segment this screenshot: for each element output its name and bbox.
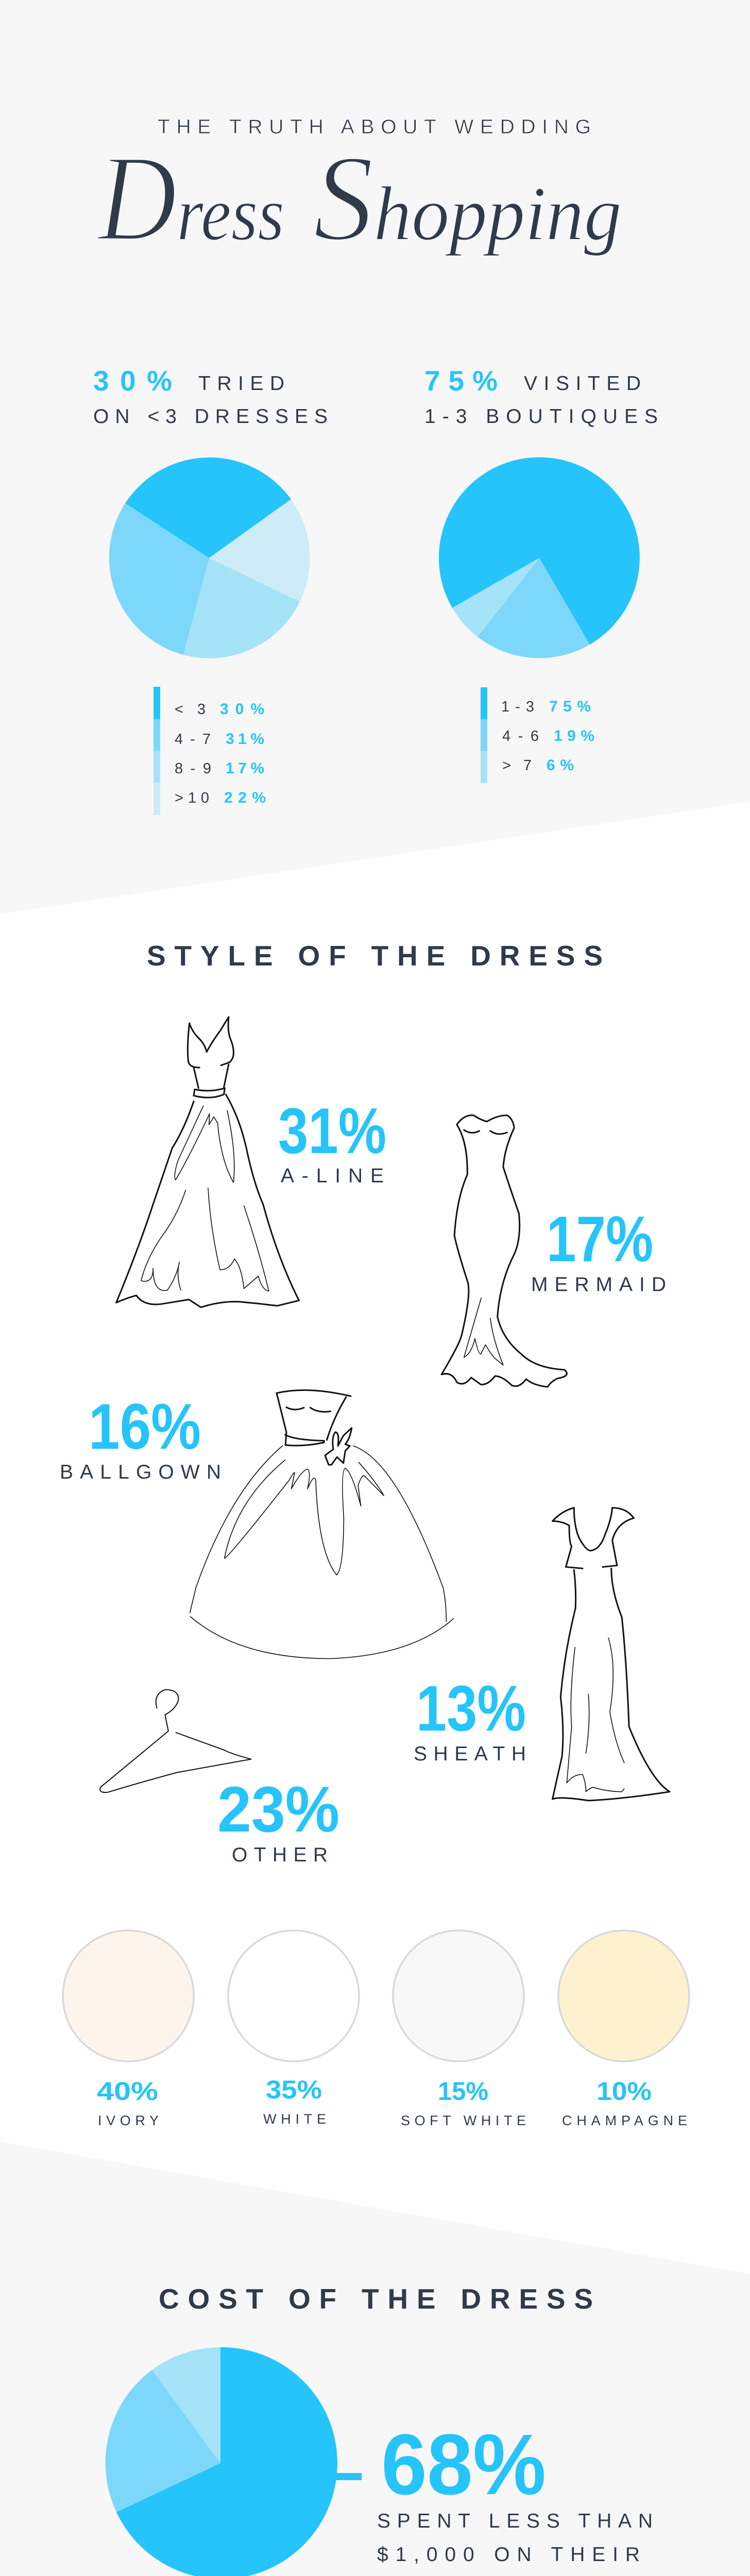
legend: dresses tried: 31% bbox=[226, 731, 264, 748]
icon: ballgown dress bbox=[190, 1390, 453, 1658]
stat: 23% other: 23% bbox=[217, 1774, 339, 1845]
stat: 16% ballgown: 16% bbox=[89, 1391, 201, 1463]
stat: 30% tried on under 3 dresses: 30% bbox=[93, 365, 172, 397]
swatch: ivory 40%: 40% bbox=[97, 2077, 158, 2106]
swatch: white 35% bbox=[228, 1930, 359, 2127]
stat: 30% tried on under 3 dresses: TRIED bbox=[198, 372, 284, 395]
stat: 13% sheath: 13% bbox=[416, 1673, 526, 1744]
pie chart: cost bbox=[106, 2347, 337, 2576]
legend: boutiques visited bbox=[481, 687, 594, 783]
stat: 17% mermaid bbox=[531, 1204, 666, 1296]
legend: dresses tried: 30% bbox=[220, 701, 264, 718]
stat: 75% visited 1-3 boutiques: VISITED bbox=[524, 372, 641, 395]
pie chart: boutiques visited bbox=[439, 457, 640, 658]
legend: dresses tried: 8 - 9 bbox=[175, 760, 211, 777]
stat: 75% visited 1-3 boutiques: 75% bbox=[424, 365, 498, 397]
legend: boutiques visited: > 7 bbox=[502, 757, 532, 774]
swatch: soft white 15%: SOFT WHITE bbox=[401, 2113, 526, 2128]
stat: 75% visited 1-3 boutiques: 1-3 BOUTIQUES bbox=[424, 405, 658, 428]
stat: 68% spent less than $1,000 bbox=[377, 2417, 653, 2576]
connector line bbox=[335, 2473, 362, 2480]
stat: 17% mermaid: 17% bbox=[547, 1204, 653, 1275]
swatch: white 35%: WHITE bbox=[263, 2111, 326, 2127]
legend: boutiques visited: 1-3 bbox=[501, 699, 534, 715]
title: Dress Shopping: Shopping bbox=[313, 129, 622, 266]
stat: 13% sheath bbox=[414, 1673, 526, 1765]
legend: dresses tried: >10 bbox=[175, 790, 209, 806]
swatch: champagne 10% bbox=[558, 1930, 689, 2128]
legend: boutiques visited: 6% bbox=[547, 757, 574, 774]
swatch: ivory 40%: IVORY bbox=[98, 2113, 159, 2128]
stat: 68% spent less than $1,000: 68% bbox=[381, 2417, 546, 2513]
swatch: white 35%: 35% bbox=[266, 2075, 322, 2104]
icon: mermaid dress bbox=[441, 1115, 567, 1387]
swatch: champagne 10%: CHAMPAGNE bbox=[562, 2113, 687, 2128]
swatch: soft white 15%: 15% bbox=[438, 2077, 488, 2106]
stat: 13% sheath: SHEATH bbox=[414, 1743, 526, 1765]
stat: 16% ballgown: BALLGOWN bbox=[60, 1461, 221, 1483]
legend: dresses tried: 22% bbox=[224, 789, 266, 806]
stat: 17% mermaid: MERMAID bbox=[531, 1274, 666, 1296]
heading: style of the dress: STYLE OF THE DRESS bbox=[147, 940, 603, 972]
legend: boutiques visited: 19% bbox=[554, 727, 594, 744]
legend: dresses tried: < 3 bbox=[175, 701, 206, 718]
stat: 30% tried on under 3 dresses: ON <3 DRESSES bbox=[93, 405, 328, 428]
legend: dresses tried: 17% bbox=[226, 760, 264, 777]
stat: 68% spent less than $1,000: SPENT LESS THAN bbox=[377, 2510, 653, 2532]
legend: boutiques visited: 75% bbox=[549, 698, 591, 715]
icon: sheath dress bbox=[553, 1508, 670, 1801]
stat: 30% tried on under 3 dresses bbox=[93, 365, 328, 428]
stat: 23% other: OTHER bbox=[232, 1844, 328, 1866]
title kicker: THE TRUTH ABOUT WEDDING bbox=[158, 116, 591, 138]
swatch: soft white 15% bbox=[393, 1930, 526, 2128]
title: Dress Shopping bbox=[96, 129, 622, 266]
legend: boutiques visited: 4 - 6 bbox=[502, 728, 539, 744]
legend: dresses tried bbox=[154, 687, 266, 815]
icon: a-line dress bbox=[116, 1017, 299, 1308]
stat: 31% a-line: A-LINE bbox=[281, 1165, 384, 1187]
title: Dress Shopping: Dress bbox=[96, 129, 284, 266]
heading: cost of the dress: COST OF THE DRESS bbox=[159, 2283, 593, 2315]
swatch: champagne 10%: 10% bbox=[596, 2077, 652, 2106]
icon: hanger bbox=[100, 1690, 251, 1792]
stat: 75% visited 1-3 boutiques bbox=[424, 365, 658, 428]
legend: dresses tried: 4 - 7 bbox=[175, 731, 211, 748]
swatch: ivory 40% bbox=[63, 1930, 194, 2128]
stat: 31% a-line bbox=[278, 1095, 386, 1187]
stat: 16% ballgown bbox=[60, 1391, 221, 1483]
stat: 31% a-line: 31% bbox=[278, 1095, 386, 1167]
pie chart: dresses tried bbox=[109, 457, 310, 658]
stat: 68% spent less than $1,000: $1,000 ON THEIR bbox=[377, 2544, 640, 2566]
